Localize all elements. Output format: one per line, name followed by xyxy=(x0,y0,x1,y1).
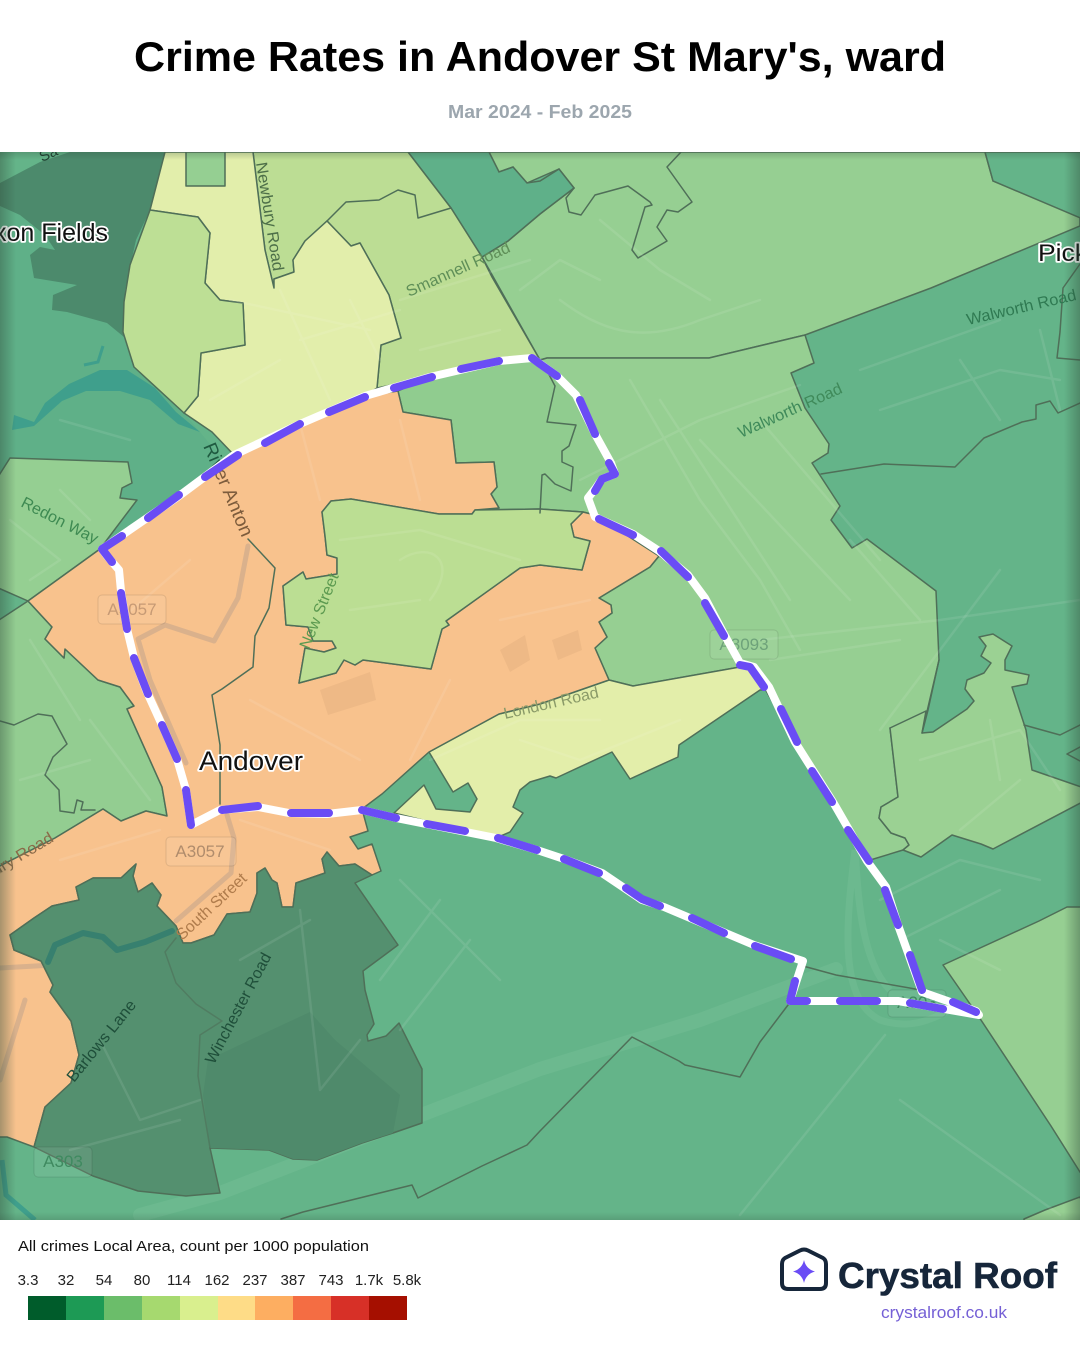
region: north-east medium green xyxy=(482,152,1080,360)
region: south darker inner xyxy=(210,1132,393,1160)
wordmark: Crystal Roof xyxy=(838,1255,1058,1296)
region: town centre orange xyxy=(0,391,659,1147)
region: west green xyxy=(0,200,240,601)
legend tick labels: 5.8k xyxy=(393,1272,422,1289)
junction loop near A303 xyxy=(848,850,950,1024)
road shield: A3093 xyxy=(710,630,778,659)
legend tick labels: 237 xyxy=(242,1272,268,1289)
road label: Redon Way: Redon Way xyxy=(18,494,101,548)
region: ward inner green xyxy=(398,358,615,515)
base layer xyxy=(0,152,1080,1220)
road shield: A3057 north xyxy=(98,595,166,624)
road shield: A303 west xyxy=(34,1147,92,1177)
legend tick labels: 743 xyxy=(318,1272,344,1289)
region: Redon Way xyxy=(0,458,137,601)
legend colour scale xyxy=(28,1296,407,1320)
region: north light green east xyxy=(253,152,540,388)
road label: Winchester Road: Winchester Road xyxy=(203,950,275,1067)
road label: Walworth Road centre: Walworth Road xyxy=(736,381,845,442)
legend tick labels: 80 xyxy=(134,1272,150,1289)
boundary lines xyxy=(0,152,1080,1219)
road shield: A3057 south: A3057 xyxy=(175,842,225,861)
region: New Street light green xyxy=(283,499,590,683)
region: north inset xyxy=(186,152,225,186)
region: north-west dark xyxy=(0,152,170,337)
title: Crime Rates in Andover St Mary's, ward xyxy=(134,33,946,80)
legend xyxy=(18,1238,422,1320)
bottom-left river xyxy=(2,1160,35,1220)
road shield: A303 east xyxy=(888,990,946,1017)
road label: Smannell Road: Smannell Road xyxy=(404,240,513,301)
legend tick labels xyxy=(18,1272,422,1289)
legend title: All crimes Local Area, count per 1000 population xyxy=(18,1238,369,1255)
ward boundary xyxy=(102,358,979,1015)
legend tick labels: 1.7k xyxy=(355,1272,384,1289)
road label: Walworth Road east: Walworth Road xyxy=(965,287,1078,329)
region: east light pocket xyxy=(879,634,1080,857)
legend tick labels: 54 xyxy=(96,1272,112,1289)
road label: New Street: New Street xyxy=(297,570,343,651)
road shield: A3057 north: A3057 xyxy=(107,600,157,619)
legend tick labels: 3.3 xyxy=(18,1272,38,1289)
region: south-east corner light xyxy=(1023,1196,1080,1220)
river through south xyxy=(48,931,172,962)
region: north-east corner xyxy=(985,152,1080,222)
road label: Barlows Lane: Barlows Lane xyxy=(64,997,140,1086)
A303 road band xyxy=(140,969,836,1215)
place label: Andover: Andover xyxy=(199,746,303,776)
south inner boundary xyxy=(165,938,222,1148)
region: east corner light xyxy=(943,907,1080,1185)
road label: London Road: London Road xyxy=(502,685,600,723)
road label: South Street: South Street xyxy=(173,870,251,944)
region: river lake xyxy=(12,346,200,432)
map edge shading xyxy=(0,152,1080,1220)
region: south-east pocket green xyxy=(595,556,740,686)
street network xyxy=(10,220,1080,1215)
website: crystalroof.co.uk xyxy=(881,1304,1008,1322)
road shield: A3093: A3093 xyxy=(719,635,769,654)
region: north pale yellow-green xyxy=(150,152,401,455)
region: west lower green xyxy=(0,601,167,868)
road label: River Anton: River Anton xyxy=(198,440,257,540)
road label: top corner: Sa xyxy=(37,142,61,166)
road shield: A3057 south xyxy=(166,837,236,866)
region: north-west light green xyxy=(123,210,245,413)
legend tick labels: 32 xyxy=(58,1272,74,1289)
logo: Crystal Roof xyxy=(782,1250,1058,1322)
legend tick labels: 162 xyxy=(204,1272,230,1289)
road shield: A303 west: A303 xyxy=(43,1152,83,1171)
legend tick labels: 387 xyxy=(280,1272,306,1289)
region: top strip dark green xyxy=(408,152,574,257)
legend tick labels: 114 xyxy=(167,1272,191,1289)
region: east middle green xyxy=(540,335,939,861)
town centre detail: rail and river xyxy=(0,539,582,1080)
region: London Road pale xyxy=(394,667,764,838)
road label: Newbury Road: Newbury Road xyxy=(252,161,286,272)
subtitle: date range: Mar 2024 - Feb 2025 xyxy=(448,102,632,122)
road shield: A303 east: A303 xyxy=(897,993,937,1012)
region: south dark green xyxy=(10,852,422,1196)
icon: house with star xyxy=(782,1250,826,1289)
